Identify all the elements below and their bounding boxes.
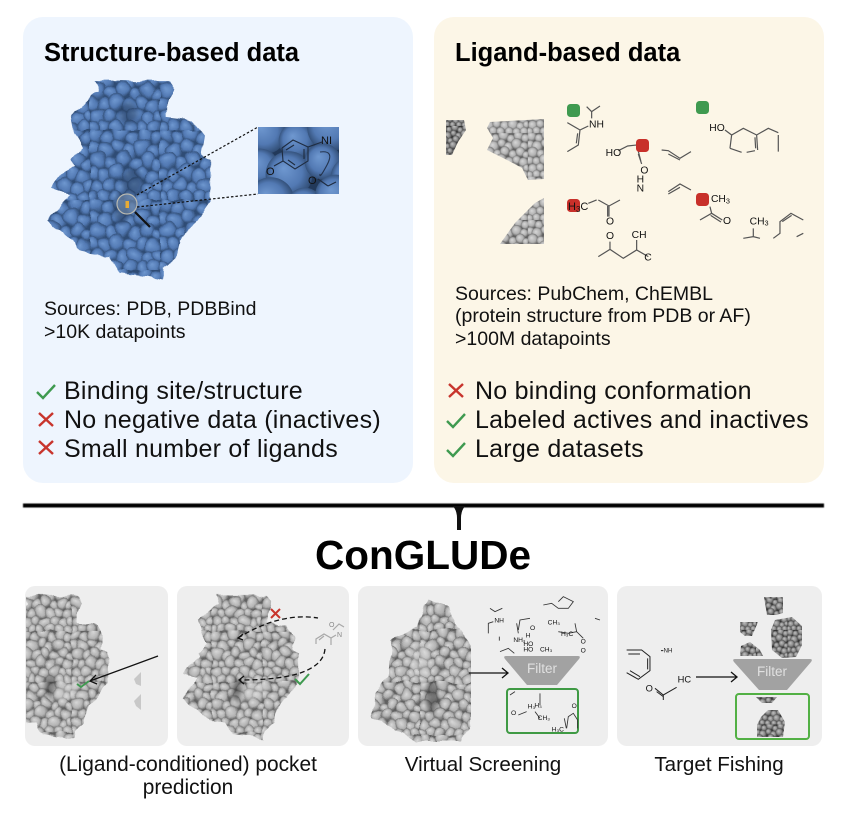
icon: magnifier on binding site — [117, 194, 150, 227]
icon: green tick in pocket — [77, 681, 89, 687]
molecules: library: CH₃ — [548, 619, 560, 626]
activity markers: H — [568, 201, 576, 213]
icon: gray ligand — [316, 622, 344, 645]
box: filtered molecules: H₃C — [552, 727, 564, 734]
molecules: ligand library: O — [606, 217, 614, 228]
box: fished targets — [736, 694, 809, 739]
molecules: library: O — [581, 648, 586, 655]
molecule: query ligand: HC — [678, 675, 691, 685]
panel: pocket prediction docking — [25, 586, 168, 746]
icon: gray protein — [26, 594, 110, 739]
zoom guide lines — [137, 127, 258, 207]
panel: structure-based data — [23, 17, 413, 483]
molecule: query ligand: NH — [664, 648, 672, 654]
molecules: ligand library: O — [640, 166, 648, 177]
icon: protein fragments — [446, 119, 544, 244]
inset: ligand in pocket: NI — [321, 135, 332, 147]
list: pros and cons — [37, 377, 381, 463]
text: sources: (protein structure from PDB or AF) — [455, 305, 751, 327]
molecules: ligand library: H — [637, 174, 644, 185]
molecules: library: HO — [523, 647, 533, 654]
icon: ligand fragments — [134, 672, 141, 710]
list: pros and cons: Small number of ligands — [64, 435, 338, 463]
box: filtered molecules: H₃ — [534, 702, 542, 709]
molecules: ligand library: HO — [606, 148, 621, 159]
caption: virtual screening: Virtual Screening — [405, 753, 561, 776]
activity markers: C — [580, 201, 588, 213]
molecules: library: O — [530, 625, 535, 632]
icon: gray ligand: N — [337, 632, 342, 639]
list: pros and cons: No binding conformation — [475, 377, 752, 405]
panel: pocket prediction ranking — [177, 586, 349, 746]
text: sources: >100M datapoints — [455, 328, 611, 350]
molecules: ligand library: N — [637, 184, 644, 195]
funnel: filter — [504, 656, 580, 685]
molecule: query ligand: O — [646, 684, 653, 694]
molecules: ligand library: 3 — [765, 219, 769, 228]
funnel: filter: Filter — [527, 661, 558, 676]
icon: gray protein — [373, 600, 472, 741]
arrow: protein to filter — [469, 668, 508, 678]
box: filtered molecules: H₃ — [528, 703, 535, 710]
panel: virtual screening — [358, 586, 608, 746]
icon: gray protein — [182, 596, 299, 739]
list: pros and cons: Binding site/structure — [64, 377, 303, 405]
panel: ligand-based data — [434, 17, 824, 483]
inset: ligand in pocket: O — [266, 166, 275, 178]
molecules: ligand library: CH — [711, 194, 726, 205]
box: filtered molecules: O — [572, 703, 577, 710]
caption: pocket prediction: (Ligand-conditioned) pocket — [59, 753, 317, 776]
icon: blue protein surface — [48, 81, 211, 280]
funnel: filter: Filter — [757, 664, 788, 679]
molecule: query ligand — [627, 648, 691, 700]
panel: target fishing — [617, 586, 822, 746]
arrow: ligand to pocket — [90, 656, 158, 684]
title: ConGLUDe — [315, 532, 531, 578]
heading: structure-based data: Structure-based data — [44, 39, 300, 67]
inset: ligand in pocket: O — [308, 175, 317, 187]
molecules: library: NH₂ — [513, 637, 526, 644]
molecules: ligand library: O — [606, 231, 614, 242]
list: pros and cons: Large datasets — [475, 435, 644, 463]
molecules: library: O — [581, 638, 586, 645]
caption: target fishing: Target Fishing — [654, 753, 784, 776]
molecules: ligand library: NH — [589, 120, 604, 131]
heading: ligand-based data: Ligand-based data — [455, 39, 681, 67]
text: sources: Sources: PDB, PDBBind — [44, 298, 256, 320]
inset: ligand in pocket — [258, 127, 339, 194]
caption: pocket prediction: prediction — [143, 776, 233, 799]
merge bracket — [23, 504, 824, 530]
list: pros and cons: No negative data (inactives) — [64, 406, 381, 434]
molecules: ligand library: CH — [632, 230, 647, 241]
arrow: ligand to filter — [696, 672, 737, 682]
list: pros and cons — [447, 377, 809, 463]
molecules: ligand library: O — [723, 216, 731, 227]
icon: red cross — [271, 609, 280, 618]
box: filtered molecules: O — [511, 710, 516, 717]
text: sources: >10K datapoints — [44, 321, 186, 343]
arrowheads — [238, 634, 244, 684]
molecules: ligand library: 3 — [726, 196, 730, 205]
molecules: library: H₃C — [561, 631, 573, 638]
icon: green tick — [295, 674, 309, 684]
molecules: library: CH₃ — [540, 647, 553, 654]
molecules: library — [488, 597, 600, 655]
arrow: dashed to wrong pocket — [238, 617, 318, 638]
activity markers — [567, 101, 709, 214]
text: sources: Sources: PubChem, ChEMBL — [455, 283, 713, 305]
molecules: library: H — [526, 632, 531, 639]
icon: protein library — [740, 597, 802, 658]
funnel: filter — [733, 659, 812, 690]
icon: gray ligand: O — [329, 622, 335, 629]
activity markers: 3 — [576, 205, 581, 214]
molecules: library: NH — [494, 618, 504, 625]
molecules: ligand library: CH — [750, 216, 765, 227]
arrow: dashed to right pocket — [240, 649, 325, 680]
list: pros and cons: Labeled actives and inactives — [475, 406, 809, 434]
molecules: library: HO — [523, 641, 533, 648]
molecules: ligand library — [567, 106, 803, 263]
molecules: ligand library: C — [644, 252, 652, 263]
box: filtered molecules: CH₃ — [538, 715, 550, 722]
molecules: ligand library: HO — [709, 123, 725, 134]
box: filtered molecules — [507, 689, 578, 734]
